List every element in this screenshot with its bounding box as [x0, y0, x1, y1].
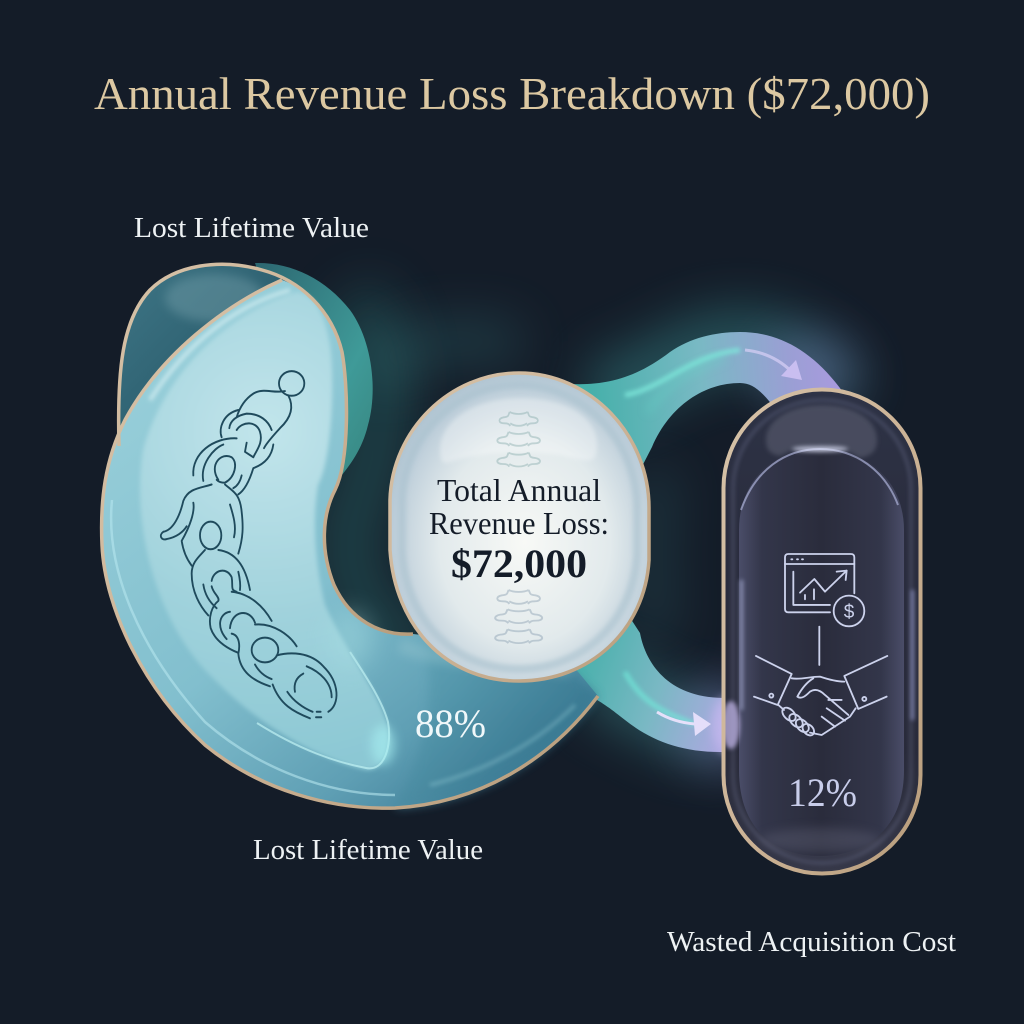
icon: dollar sign: $ [844, 602, 855, 623]
kidney borders [119, 264, 413, 634]
flow: upper band to acquisition pill [570, 332, 845, 480]
panel: kidney, lost lifetime value [102, 263, 598, 808]
panel: center total orb: $72,000 [451, 541, 587, 586]
kidney tail shading [395, 645, 598, 808]
kidney rear hump [255, 263, 373, 480]
panel: center total orb: Revenue Loss: [429, 505, 609, 541]
orb tan border [390, 373, 649, 681]
pill inner glass [739, 448, 904, 856]
label: wasted acquisition cost: Wasted Acquisition Cost [667, 926, 956, 958]
ambient glow [348, 300, 855, 765]
pill top shine [766, 405, 877, 458]
kidney rear lobe [119, 264, 345, 500]
title: Annual Revenue Loss Breakdown ($72,000) [94, 68, 930, 119]
orb text: Total Annual [437, 472, 601, 508]
highlights [257, 652, 389, 768]
lavender inflow overlap [722, 701, 740, 749]
arrow: upper flow [745, 350, 802, 380]
pill tan border [724, 390, 920, 874]
kidney inner glass [140, 292, 389, 770]
kidney front border [102, 280, 598, 808]
flow: lower band to acquisition pill [540, 610, 745, 753]
label: lost lifetime value top: Lost Lifetime Value [134, 212, 369, 244]
value: 12 percent: 12% [788, 770, 857, 815]
icon: faint spine top [497, 412, 540, 467]
kidney main body [102, 280, 598, 808]
arrow: lower flow [657, 712, 711, 736]
icon: faint spine bottom [495, 590, 542, 643]
icon: chain of linked people [161, 371, 337, 718]
label: lost lifetime value bottom: Lost Lifetime Value [253, 834, 483, 866]
icon: browser chart with dollar coin and handshake [754, 554, 887, 738]
orb top shine [440, 398, 597, 463]
panel: acquisition pill [722, 389, 922, 874]
value: 88 percent: 88% [415, 701, 486, 746]
panel: center total orb [390, 373, 649, 681]
